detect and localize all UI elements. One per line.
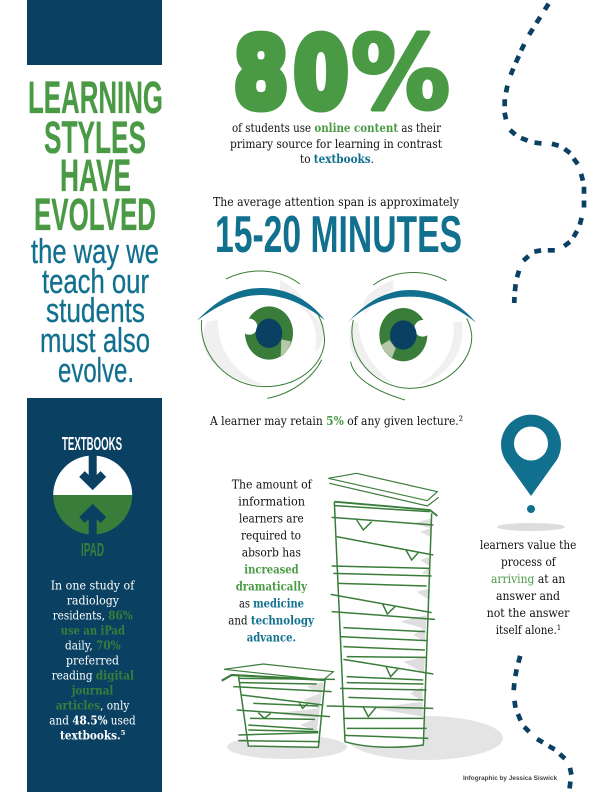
text: amount of information: absorb has [242, 545, 301, 560]
icon: split circle with arrows [53, 456, 132, 535]
text: radiology residents study: textbooks.⁵ [60, 727, 125, 742]
big number: 15-20 minutes: 15-20 MINUTES [215, 206, 462, 264]
panel: top navy block [27, 0, 162, 65]
dashed path: lower route [514, 656, 571, 788]
big number: 80%: 0 [294, 18, 348, 130]
text: learners value the process: process of [501, 554, 557, 569]
subheading: the way we teach: must also [40, 322, 150, 360]
illustration: tall paper stack [327, 473, 439, 747]
subheading: the way we teach: the way we [31, 233, 159, 271]
text: radiology residents study: radiology [67, 592, 119, 607]
dashed path: upper route [505, 4, 584, 303]
text: radiology residents study: articles, only [56, 697, 129, 712]
text: amount of information: learners are [239, 511, 304, 526]
subheading: the way we teach: evolve. [58, 352, 134, 390]
text: amount of information: advance. [247, 630, 296, 645]
credit: Infographic by Jessica Siswick [463, 775, 557, 782]
text: amount of information [228, 476, 315, 645]
heading: learning styles have evolved: EVOLVED [34, 189, 156, 240]
text: online content statistic: primary source for learning in contrast [230, 136, 442, 151]
text: amount of information: required to [241, 528, 301, 542]
panel: textbooks versus iPad [27, 398, 162, 792]
heading: learning styles have evolved [28, 72, 163, 240]
text: learner retention: A learner may retain 5% of any given lecture.² [209, 413, 463, 428]
text: amount of information: increased [244, 562, 299, 577]
icon: right eye [348, 272, 476, 400]
label: textbooks: TEXTBOOKS [62, 434, 122, 454]
text: radiology residents study: In one study of [51, 577, 136, 592]
text: amount of information: dramatically [236, 579, 308, 594]
illustration: short paper stack [222, 664, 335, 747]
text: learners value the process: not the answer [487, 605, 569, 620]
text: radiology residents study: and 48.5% used [49, 712, 136, 727]
text: amount of information: The amount of [232, 476, 313, 491]
text: amount of information: and technology [228, 613, 315, 628]
text: radiology residents study [49, 577, 136, 742]
text: radiology residents study: residents, 86% [53, 607, 133, 622]
text: amount of information: information [238, 494, 305, 509]
icon: map pin [497, 415, 565, 531]
heading: learning styles have evolved: STYLES [44, 112, 146, 163]
text: learners value the process: learners value the [480, 537, 576, 552]
subheading: the way we teach [31, 233, 159, 390]
big number: 80% [234, 14, 450, 133]
text: amount of information: as medicine [239, 596, 304, 611]
heading: learning styles have evolved: HAVE [60, 150, 131, 201]
text: radiology residents study: reading digital [52, 667, 134, 682]
text: learners value the process [480, 537, 576, 637]
icon: left eye [197, 271, 325, 398]
text: average attention span: The average attention span is approximately [213, 194, 459, 209]
text: learners value the process: answer and [496, 588, 560, 603]
big number: 80%: 8 [234, 18, 288, 130]
text: online content statistic [230, 120, 442, 166]
text: online content statistic: to textbooks. [300, 151, 374, 166]
subheading: the way we teach: teach our [42, 263, 149, 301]
text: learners value the process: arriving at an [491, 571, 565, 586]
illustration: paper stack shadows [227, 716, 503, 760]
text: online content statistic: of students use online content as their [232, 120, 441, 135]
label: iPad: IPAD [81, 540, 104, 560]
big number: 80%: % [351, 14, 450, 133]
subheading: the way we teach: students [46, 292, 145, 330]
text: radiology residents study: journal [71, 682, 114, 697]
text: radiology residents study: use an iPad [61, 622, 125, 637]
heading: learning styles have evolved: LEARNING [28, 72, 163, 123]
text: radiology residents study: daily, 70% [65, 638, 121, 652]
text: learners value the process: itself alone.¹ [496, 622, 561, 637]
text: radiology residents study: preferred [66, 652, 119, 667]
